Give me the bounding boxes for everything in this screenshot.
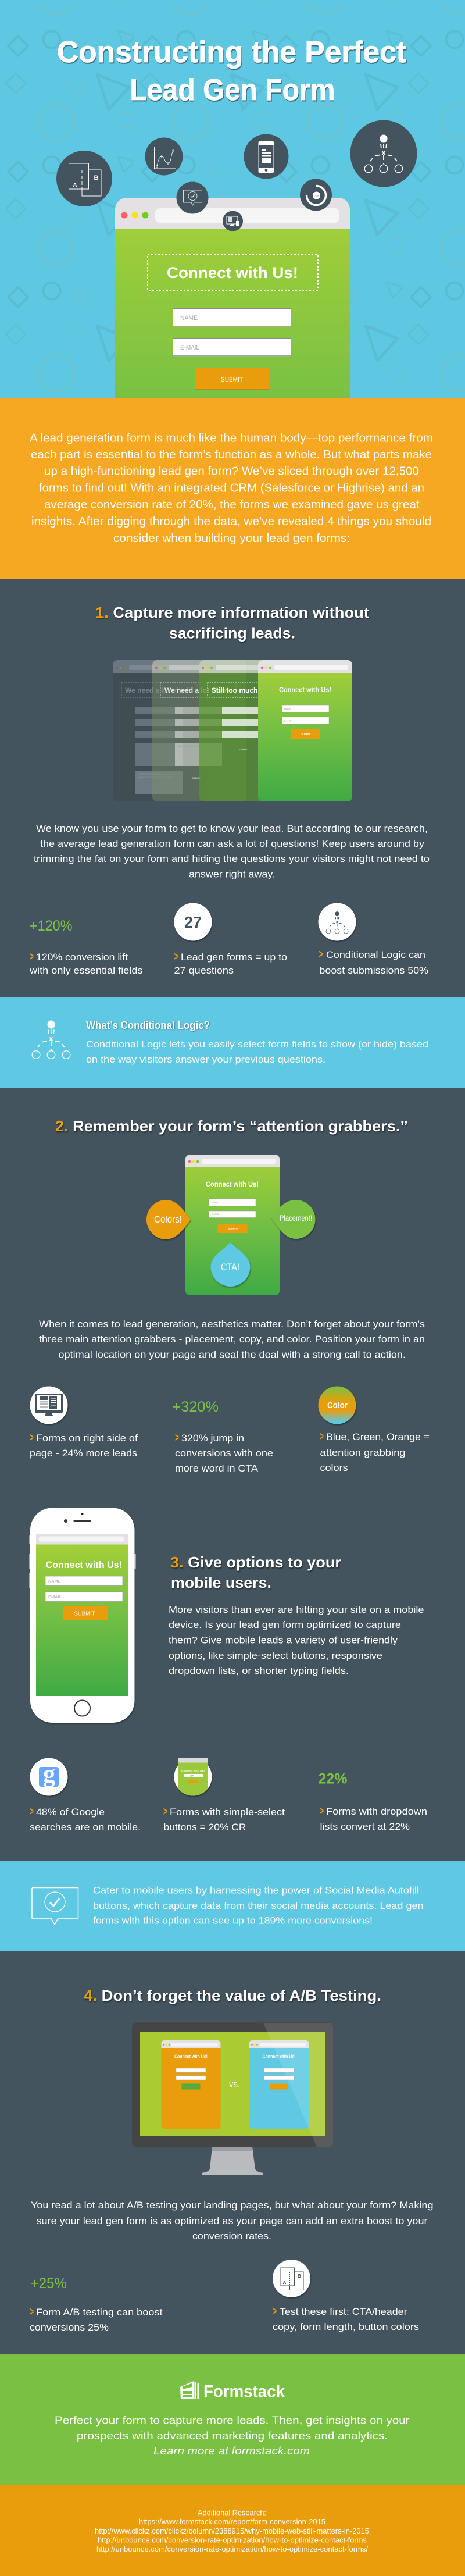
stat: 27 questions: 27 questions: [174, 965, 234, 976]
stat: dropdown lists: 22%: [319, 1770, 348, 1787]
illustration: attention grabbers form: Connect with Us!: [206, 1180, 259, 1188]
form layer 1: WRITE A PERSONAL ESSAY ON: [138, 772, 173, 775]
panel: dark sections background: [0, 579, 465, 2354]
icon: google: [30, 1758, 67, 1796]
text: section 4 paragraph: conversion rates.: [192, 2231, 271, 2242]
stat: 25 percent: conversions 25%: [30, 2322, 109, 2333]
stat: google mobile: >: [30, 1805, 34, 1818]
stat: simple select: buttons = 20% CR: [164, 1822, 246, 1833]
stat: 120 percent: 120% conversion lift: [36, 952, 128, 963]
stat: color: >: [320, 1430, 324, 1443]
text: section 3 paragraph: options, like simple-select buttons, responsive: [169, 1650, 382, 1661]
icon: A/B pages: A: [282, 2280, 286, 2285]
stat: color: [319, 1387, 430, 1473]
stat: 120 percent: [29, 918, 143, 976]
heading: section 1: sacrificing leads.: [169, 625, 295, 642]
icon: chart: [145, 137, 183, 176]
form layer 4: E-MAIL: [284, 719, 292, 722]
stat: 120 percent: +120%: [30, 918, 72, 934]
heading: section 3: 3. Give options to your: [170, 1554, 341, 1571]
panel: what's conditional logic: [0, 997, 465, 1088]
stat: 27 questions: >: [174, 950, 178, 963]
stat: 120 percent: >: [30, 950, 34, 963]
panel: call to action: [0, 2354, 465, 2485]
heading: section 3: mobile users.: [171, 1574, 271, 1591]
panel: hero: [0, 0, 465, 398]
stat: conditional logic: >: [319, 948, 323, 961]
title: [57, 35, 406, 107]
stat: test these first: copy, form length, button colors: [273, 2321, 419, 2332]
callout text: [86, 1039, 428, 1065]
title: Lead Gen Form: [130, 73, 335, 107]
form variant A: Connect with Us!: [174, 2054, 208, 2059]
callout: placement: Placement!: [280, 1213, 312, 1223]
illustration: attention grabbers form: SUBMIT!: [228, 1227, 238, 1230]
call to action text: [55, 2415, 410, 2457]
form layer 3: SUBMIT: [239, 748, 248, 751]
icon: monitor: [30, 1387, 67, 1424]
icon: progress ring: 75%: [314, 194, 319, 197]
text: section 4 paragraph: [31, 2200, 434, 2242]
stat: conditional logic: boost submissions 50%: [320, 965, 428, 976]
callout: colors: [146, 1200, 191, 1239]
logo: Formstack: Formstack: [203, 2382, 285, 2401]
form variant B: [249, 2040, 309, 2129]
panel: additional research: Additional Research:: [198, 2509, 266, 2517]
stat: 25 percent: +25%: [30, 2275, 67, 2292]
panel: intro: consider when building your lead gen forms:: [113, 532, 350, 545]
text: section 1 paragraph: the average lead generation form can ask a lot of questions! Keep users around by: [40, 838, 425, 849]
stat: 320 percent: +320%: [172, 1399, 219, 1415]
text: section 3 paragraph: them? Give mobile leads a variety of user-friendly: [169, 1634, 398, 1646]
panel: intro: A lead generation form is much like the human body—top performance from: [30, 432, 433, 444]
form layer 2: SUBMIT: [192, 776, 201, 779]
form variant A: [162, 2040, 221, 2129]
panel: additional research: http://www.clickz.com/clickz/column/2388915/why-mobile-web-still-matters-in-2015: [95, 2527, 369, 2535]
stat: 320 percent: [172, 1399, 273, 1474]
form layer 3: [199, 660, 294, 801]
stat: 27 questions: 27: [184, 913, 202, 931]
stat: dropdown lists: >: [320, 1805, 324, 1818]
illustration: attention grabbers form: [146, 1155, 315, 1295]
label: vs: VS.: [229, 2080, 239, 2089]
stat: test these first: [273, 2260, 419, 2332]
browser form illustration: SUBMIT: [221, 376, 243, 383]
panel: intro: insights. After digging through the data, we've revealed 4 things you should: [31, 515, 431, 528]
stat: 25 percent: Form A/B testing can boost: [36, 2307, 163, 2318]
stat: 27 questions: [174, 903, 287, 976]
stat: 120 percent: with only essential fields: [29, 965, 143, 976]
icon: A/B pages: B: [298, 2274, 301, 2279]
panel: additional research: https://www.formstack.com/report/form-conversion-2015: [139, 2518, 326, 2526]
form layer 4: Connect with Us!: [279, 686, 331, 694]
icon: conditional logic: [350, 120, 417, 187]
icon: speech check: [177, 181, 208, 214]
panel: additional research: http://unbounce.com/conversion-rate-optimization/how-to-optimize-contact-forms/: [96, 2545, 369, 2553]
stat: simple select: >: [163, 1805, 167, 1818]
panel: intro: each part is essential to the form’s function as a whole. But what parts make: [31, 448, 432, 461]
icon: A/B pages: [273, 2260, 310, 2297]
form layer 2: We need a lot of info: [164, 686, 233, 694]
text: section 2 paragraph: three main attention grabbers - placement, copy, and color. Position your form in an: [39, 1334, 425, 1345]
form layer 3: Still too much info: [212, 686, 273, 694]
stat: dropdown lists: Forms with dropdown: [326, 1806, 427, 1817]
icon: speech check: [32, 1888, 78, 1925]
panel: intro: average conversion rate of 20%, the forms we examined gave us great: [44, 498, 420, 511]
illustration: stack of forms: [113, 660, 352, 801]
stat: color: attention grabbing: [320, 1447, 406, 1458]
icon: mini form: 20%: [190, 1775, 194, 1777]
stat: 320 percent: more word in CTA: [175, 1463, 259, 1474]
form layer 1: [113, 660, 207, 801]
form layer 2: [152, 660, 246, 801]
callout: colors: Colors!: [154, 1214, 182, 1225]
title: Constructing the Perfect: [57, 35, 406, 69]
callout: cta: [210, 1242, 250, 1287]
callout: cta: CTA!: [221, 1262, 239, 1273]
illustration: phone: EMAIL: [48, 1594, 62, 1599]
stat: 320 percent: >: [175, 1431, 179, 1444]
stat: color: colors: [320, 1462, 348, 1473]
text: section 1 paragraph: trimming the fat on your form and hiding the questions your visitors might not need to: [34, 853, 430, 864]
callout heading: What’s Conditional Logic?: [86, 1020, 210, 1031]
illustration: phone: [29, 1508, 136, 1723]
icon: A/B test: B: [94, 174, 99, 181]
form layer 4: NAME: [284, 707, 291, 710]
stat: 25 percent: >: [30, 2306, 34, 2318]
text: section 4 paragraph: sure your lead gen form is as optimized as your page can add an extra boost to your: [36, 2215, 428, 2226]
callout text: forms with this option can see up to 189% more conversions!: [93, 1915, 373, 1926]
text: section 3 paragraph: More visitors than ever are hitting your site on a mobile: [169, 1604, 424, 1615]
stat: color: Color: [327, 1401, 348, 1410]
panel: additional research: [0, 2485, 465, 2576]
text: section 3 paragraph: dropdown lists, or shorter typing fields.: [169, 1665, 349, 1676]
text: section 3 paragraph: device. Is your lead gen form optimized to capture: [169, 1619, 401, 1630]
illustration: attention grabbers form: NAME: [212, 1201, 219, 1204]
stat: 320 percent: conversions with one: [175, 1448, 273, 1459]
heading: section 4: 4. Don’t forget the value of A/B Testing.: [84, 1987, 381, 2004]
icon: devices: [223, 211, 243, 231]
callout text: buttons, which capture data from their social media accounts. Lead gen: [93, 1900, 423, 1911]
icon: mini form: [174, 1758, 212, 1796]
callout text: on the way visitors answer your previous questions.: [86, 1054, 326, 1065]
stat: google mobile: searches are on mobile.: [30, 1822, 141, 1833]
text: section 1 paragraph: We know you use your form to get to know your lead. But according to our research,: [36, 823, 428, 834]
icon: A/B test: A: [73, 182, 77, 189]
form layer 1: We need a lot of info: [125, 686, 193, 694]
call to action text: prospects with advanced marketing features and analytics.: [77, 2430, 388, 2442]
form variant B: Connect with Us!: [263, 2054, 295, 2059]
form layer 1: WHALE MIGRATION PATTERNS: [138, 776, 173, 779]
stat: conditional logic: Conditional Logic can: [326, 949, 425, 960]
heading: section 3: [170, 1554, 341, 1591]
stat: simple select: [163, 1758, 285, 1833]
illustration: phone: Connect with Us!: [45, 1559, 122, 1570]
text: section 2 paragraph: optimal location on your page and seal the deal with a strong call to action.: [58, 1349, 406, 1360]
icon: google: g: [43, 1761, 55, 1788]
illustration: attention grabbers form: E-MAIL: [212, 1213, 220, 1216]
panel: intro: up a high-functioning lead gen form? We’ve sliced through over 12,500: [44, 465, 419, 478]
icon: progress ring: [300, 179, 332, 211]
callout text: Cater to mobile users by harnessing the power of Social Media Autofill: [93, 1884, 419, 1896]
browser form illustration: [115, 198, 350, 398]
stat: dropdown lists: lists convert at 22%: [320, 1821, 410, 1832]
illustration: phone: NAME: [48, 1579, 61, 1584]
call to action text: Learn more at formstack.com: [153, 2445, 310, 2457]
icon: mini form: Connect with Us!: [181, 1769, 205, 1772]
heading: section 1: 1. Capture more information without: [95, 604, 369, 621]
heading: section 1: [95, 604, 369, 642]
callout text: [93, 1884, 423, 1926]
illustration: monitor A/B test: [132, 2023, 333, 2175]
icon: mobile: [244, 134, 288, 179]
browser form illustration: NAME: [180, 315, 198, 322]
stat: placement: >: [30, 1431, 34, 1444]
panel: intro: forms to find out! With an integrated CRM (Salesforce or Highrise) and an: [39, 482, 424, 494]
callout text: Conditional Logic lets you easily select form fields to show (or hide) based: [86, 1039, 428, 1050]
text: section 2 paragraph: When it comes to lead generation, aesthetics matter. Don’t forget about your form’s: [39, 1319, 425, 1330]
stat: 27 questions: Lead gen forms = up to: [181, 952, 287, 963]
form layer 4: SUBMIT: [301, 733, 310, 735]
stat: test these first: Test these first: CTA/header: [280, 2306, 407, 2317]
panel: additional research: http://unbounce.com/conversion-rate-optimization/how-to-optimize-contact-forms: [98, 2536, 367, 2544]
stat: test these first: >: [273, 2305, 277, 2318]
stat: 320 percent: 320% jump in: [181, 1433, 244, 1444]
text: section 4 paragraph: You read a lot about A/B testing your landing pages, but what about your form? Making: [31, 2200, 434, 2211]
heading: section 2: 2. Remember your form’s “attention grabbers.”: [55, 1117, 408, 1135]
stat: simple select: Forms with simple-select: [170, 1807, 285, 1818]
stat: google mobile: [30, 1758, 141, 1833]
icon: A/B test: [56, 151, 112, 206]
illustration: phone: SUBMIT: [74, 1610, 95, 1617]
browser form illustration: E-MAIL: [180, 344, 199, 351]
callout: placement: [271, 1200, 315, 1239]
stat: placement: page - 24% more leads: [30, 1448, 137, 1459]
call to action text: Perfect your form to capture more leads. Then, get insights on your: [55, 2415, 410, 2427]
text: section 2 paragraph: [39, 1319, 425, 1360]
stat: placement: Forms on right side of: [36, 1433, 138, 1444]
stat: 25 percent: [30, 2275, 163, 2333]
stat: conditional logic: [319, 903, 428, 976]
panel: intro: [0, 398, 465, 579]
stat: color: Blue, Green, Orange =: [326, 1431, 430, 1442]
form layer 2: WHY DO YOU WANT TO CONNECT?: [178, 744, 218, 747]
browser form illustration: Connect with Us!: [167, 264, 298, 282]
icon: conditional logic: [32, 1020, 70, 1059]
text: section 3 paragraph: [169, 1604, 424, 1676]
stat: google mobile: 48% of Google: [36, 1807, 105, 1818]
panel: social autofill: [0, 1861, 465, 1951]
form layer 4: [258, 660, 352, 801]
stat: placement: [30, 1387, 138, 1459]
stat: dropdown lists: [319, 1770, 427, 1832]
text: section 1 paragraph: answer right away.: [189, 869, 275, 879]
text: section 1 paragraph: [34, 823, 430, 879]
